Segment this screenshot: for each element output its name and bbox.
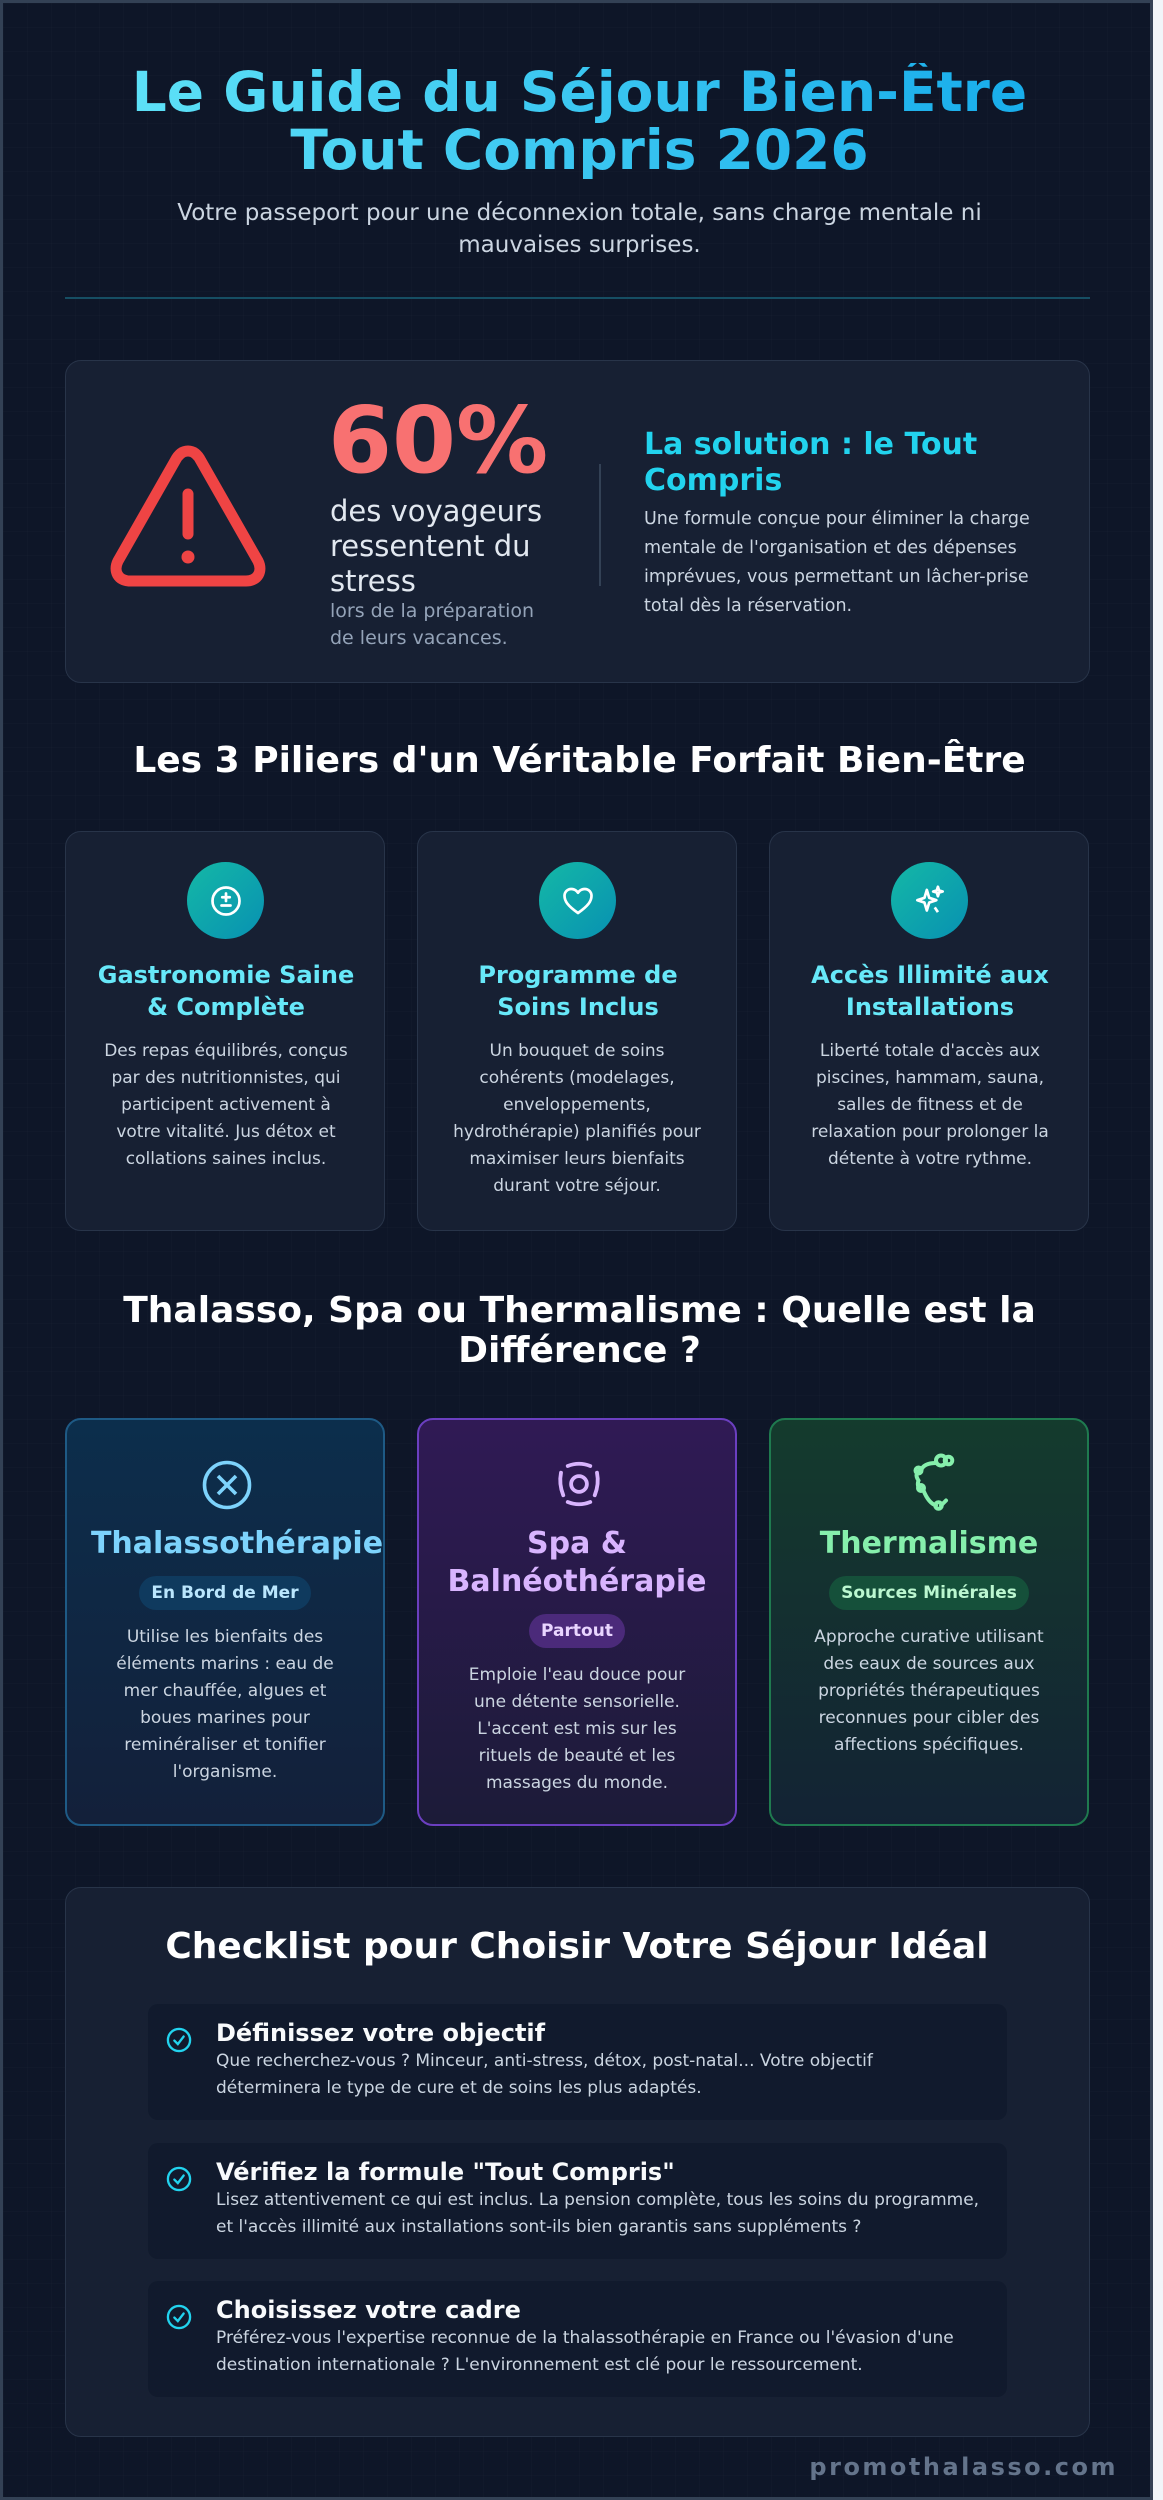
footer brand: promothalasso.com bbox=[809, 2453, 1118, 2481]
stat number: 60% bbox=[328, 387, 548, 494]
title: Tout Compris 2026 bbox=[290, 118, 869, 182]
panel: soins bbox=[417, 831, 737, 1231]
item 2: Lisez attentivement ce qui est inclus. La pension complète, tous les soins du programme, et l'accès illimité aux installations sont-ils bien garantis sans suppléments ? bbox=[216, 2190, 979, 2237]
icon: spa bbox=[558, 1462, 600, 1506]
item 2 bbox=[148, 2143, 1007, 2259]
text: Liberté totale d'accès aux piscines, hammam, sauna, salles de fitness et de relaxation pour prolonger la détente à votre rythme. bbox=[811, 1041, 1049, 1169]
icon: check bbox=[166, 2304, 192, 2330]
title bbox=[3, 63, 1156, 179]
text: Des repas équilibrés, conçus par des nutritionnistes, qui participent activement à votre vitalité. Jus détox et collations saines inclus. bbox=[104, 1041, 348, 1169]
item 1 bbox=[148, 2004, 1007, 2120]
heading: Checklist pour Choisir Votre Séjour Idéal bbox=[165, 1926, 989, 1967]
icon: warning triangle bbox=[110, 446, 266, 586]
text: Utilise les bienfaits des éléments marins : eau de mer chauffée, algues et boues marines pour reminéraliser et tonifier l'organisme. bbox=[116, 1627, 334, 1782]
text: hydrothérapie) planifiés pour bbox=[453, 1122, 701, 1142]
item 3: Préférez-vous l'expertise reconnue de la thalassothérapie en France ou l'évasion d'une destination internationale ? L'environnement est clé pour le ressourcement. bbox=[216, 2328, 954, 2375]
heading: piliers: Les 3 Piliers d'un Véritable Forfait Bien-Être bbox=[133, 740, 1026, 781]
solution text: Une formule conçue pour éliminer la charge mentale de l'organisation et des dépenses imprévues, vous permettant un lâcher-prise total dès la réservation. bbox=[644, 509, 1030, 616]
panel: checklist bbox=[65, 1887, 1090, 2437]
title: Le Guide du Séjour Bien-Être bbox=[132, 60, 1027, 124]
stat text: des voyageurs ressentent du stress bbox=[330, 494, 542, 598]
badge: Sources Minérales bbox=[841, 1583, 1017, 1603]
heading: comparaison: Thalasso, Spa ou Thermalisme : Quelle est la Différence ? bbox=[123, 1290, 1036, 1371]
text: Un bouquet de soins bbox=[490, 1041, 664, 1061]
item 2: Vérifiez la formule "Tout Compris" bbox=[216, 2158, 675, 2186]
item 3 bbox=[148, 2281, 1007, 2397]
text: durant votre séjour. bbox=[493, 1176, 661, 1196]
icon: check bbox=[166, 2028, 192, 2052]
panel: thalasso bbox=[65, 1418, 385, 1826]
panel: stat bbox=[65, 360, 1090, 683]
item 1: Définissez votre objectif bbox=[216, 2019, 545, 2047]
title: Thermalisme bbox=[820, 1526, 1038, 1561]
badge bbox=[139, 1576, 311, 1610]
text bbox=[453, 1041, 701, 1196]
icon: plate bbox=[187, 862, 264, 939]
icon: thalasso bbox=[202, 1460, 252, 1510]
icon: check bbox=[166, 2166, 192, 2192]
title: Accès Illimité aux Installations bbox=[811, 961, 1049, 1021]
icon: sparkles bbox=[891, 862, 968, 939]
stat note: lors de la préparation de leurs vacances. bbox=[330, 600, 534, 649]
badge: En Bord de Mer bbox=[151, 1583, 299, 1603]
text: maximiser leurs bienfaits bbox=[469, 1149, 685, 1169]
title: Programme de Soins Inclus bbox=[478, 961, 678, 1021]
badge bbox=[829, 1576, 1029, 1610]
subtitle: Votre passeport pour une déconnexion totale, sans charge mentale ni mauvaises surprises. bbox=[177, 200, 982, 258]
text: enveloppements, bbox=[503, 1095, 651, 1115]
solution heading: La solution : le Tout Compris bbox=[644, 427, 977, 498]
text: Emploie l'eau douce pour une détente sensorielle. L'accent est mis sur les rituels de beauté et les massages du monde. bbox=[469, 1665, 685, 1793]
item 3: Choisissez votre cadre bbox=[216, 2296, 521, 2324]
panel: spa bbox=[417, 1418, 737, 1826]
item 1: Que recherchez-vous ? Minceur, anti-stress, détox, post-natal... Votre objectif déterminera le type de cure et de soins les plus adaptés. bbox=[216, 2051, 873, 2098]
icon: thermal bbox=[914, 1454, 954, 1511]
title: Spa & bbox=[527, 1526, 627, 1561]
panel: gastronomie bbox=[65, 831, 385, 1231]
panel: installations bbox=[769, 831, 1089, 1231]
text: Approche curative utilisant des eaux de sources aux propriétés thérapeutiques reconnues pour cibler des affections spécifiques. bbox=[814, 1627, 1044, 1755]
badge bbox=[529, 1614, 625, 1648]
text: cohérents (modelages, bbox=[479, 1068, 675, 1088]
title: Thalassothérapie bbox=[91, 1526, 383, 1561]
title bbox=[448, 1526, 706, 1599]
icon: heart bbox=[539, 862, 616, 939]
title: Balnéothérapie bbox=[448, 1564, 706, 1599]
panel: thermalisme bbox=[769, 1418, 1089, 1826]
title: Gastronomie Saine & Complète bbox=[98, 961, 354, 1021]
badge: Partout bbox=[541, 1621, 613, 1641]
